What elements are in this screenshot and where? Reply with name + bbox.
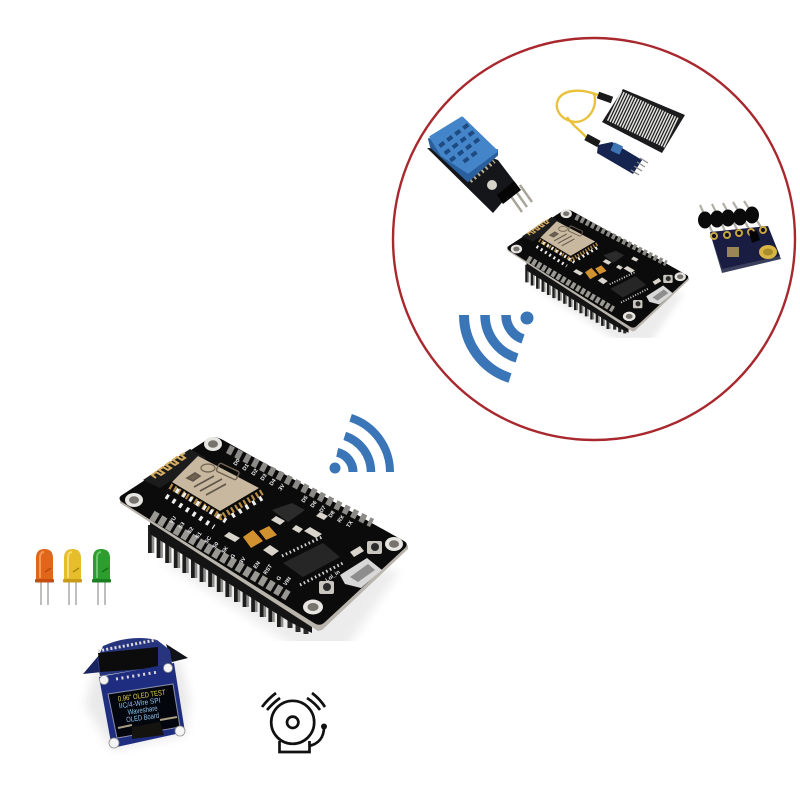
board silk labels: D7	[319, 505, 328, 514]
board silk labels: 3V	[239, 556, 248, 565]
connectors	[586, 95, 612, 144]
black pcb	[427, 148, 517, 213]
board silk labels: Lol_in	[325, 569, 342, 584]
ch340 chip	[283, 543, 340, 577]
screen text: IIC/4-Wire SPI	[118, 696, 161, 710]
chip legs	[282, 537, 343, 585]
board silk labels: G	[230, 553, 237, 560]
rear wedge right	[166, 644, 188, 662]
pins	[510, 185, 532, 212]
white pads	[166, 490, 262, 527]
yellow LED	[63, 549, 82, 582]
board silk labels: D6	[310, 500, 319, 509]
pin pads	[116, 672, 158, 679]
board silk labels: S1	[195, 531, 204, 540]
header pins top row	[228, 449, 372, 523]
control module	[597, 142, 642, 174]
sensor chip	[727, 247, 739, 257]
micro usb	[340, 558, 382, 588]
header	[698, 206, 759, 228]
esp shield	[172, 456, 259, 511]
icon: wifi signal main	[330, 418, 390, 474]
screen text	[117, 688, 166, 724]
board silk labels: D8	[328, 510, 337, 519]
pins	[700, 201, 763, 236]
screen text: Waveshare	[127, 703, 158, 717]
board silk labels: SK	[221, 545, 230, 555]
board silk labels: D2	[251, 468, 260, 477]
dark transistor	[749, 231, 760, 243]
pcb edge	[710, 227, 781, 273]
bell base	[280, 741, 310, 752]
header	[497, 181, 521, 204]
board silk labels: EN	[253, 560, 262, 570]
pins	[150, 525, 306, 634]
pcb	[710, 226, 780, 269]
yellow wire	[557, 91, 598, 138]
main NodeMCU board	[120, 437, 408, 650]
board silk labels	[169, 458, 355, 587]
sensing plate	[602, 89, 685, 153]
solder pads	[711, 227, 766, 239]
potentiometer	[610, 142, 623, 155]
board silk labels: TX	[346, 520, 355, 529]
board silk labels: D3	[260, 473, 269, 482]
orange capacitors	[243, 526, 277, 548]
antenna trace	[152, 453, 185, 478]
soft ground shadow	[160, 560, 400, 650]
corner holes	[100, 664, 185, 748]
board silk labels: RST	[263, 563, 274, 576]
green LED	[92, 549, 111, 582]
LED legs	[41, 582, 105, 605]
antenna pcb	[143, 449, 206, 488]
board silk labels: 3V	[278, 483, 287, 492]
board silk labels: S0	[212, 541, 221, 550]
small smd parts	[224, 512, 364, 557]
clapper ring	[287, 717, 298, 728]
board silk labels: VIN	[283, 576, 293, 587]
board silk labels: D5	[301, 495, 310, 504]
icon: wifi signal in circle	[464, 312, 534, 378]
icon: alarm bell	[262, 693, 327, 752]
board silk labels: S3	[178, 521, 187, 530]
small NodeMCU board in circle	[507, 209, 689, 344]
blue body side	[429, 139, 497, 181]
black header	[98, 647, 158, 672]
buttons	[319, 541, 382, 594]
module pins	[631, 158, 648, 175]
board silk labels: G	[276, 575, 283, 582]
board silk labels: VU	[169, 515, 178, 525]
blue body	[431, 118, 496, 172]
screen text: OLED Board	[126, 711, 160, 724]
shield markings	[187, 463, 240, 495]
mounting holes	[125, 437, 403, 614]
DHT11 sensor	[427, 118, 532, 213]
gold hole	[759, 245, 777, 259]
front pcb	[99, 663, 185, 748]
LEDs	[35, 549, 111, 605]
screen text: 0.96" OLED TEST	[117, 688, 166, 703]
pcb edge	[120, 498, 408, 631]
esp module gold pads	[170, 486, 264, 517]
voltage regulator	[272, 503, 305, 522]
bell body	[271, 701, 314, 744]
board silk labels: RX	[337, 514, 346, 524]
hammer	[309, 727, 324, 746]
header plastic	[150, 518, 312, 633]
vents	[438, 123, 486, 169]
comb traces	[614, 106, 672, 133]
rear wedge left	[83, 654, 102, 674]
OLED display module	[83, 638, 190, 750]
pressure sensor module	[698, 201, 781, 273]
board silk labels: D0	[233, 458, 242, 467]
panel: sensor node circle	[393, 38, 795, 440]
pcb	[120, 437, 407, 625]
board silk labels: SC	[204, 535, 213, 545]
board silk labels: S2	[187, 526, 196, 535]
mounting hole	[487, 180, 497, 190]
header pins bottom row	[152, 515, 288, 596]
gold pads	[470, 161, 494, 181]
sound waves	[262, 693, 325, 710]
header top pins	[98, 640, 156, 651]
board silk labels: D1	[242, 463, 251, 472]
rear pcb dome	[97, 638, 172, 676]
soft shadow	[85, 660, 190, 750]
board silk labels: D4	[269, 477, 278, 487]
rain sensor	[557, 89, 685, 175]
ribbon	[132, 722, 164, 739]
oled screen	[108, 684, 180, 738]
orange LED	[35, 549, 54, 582]
